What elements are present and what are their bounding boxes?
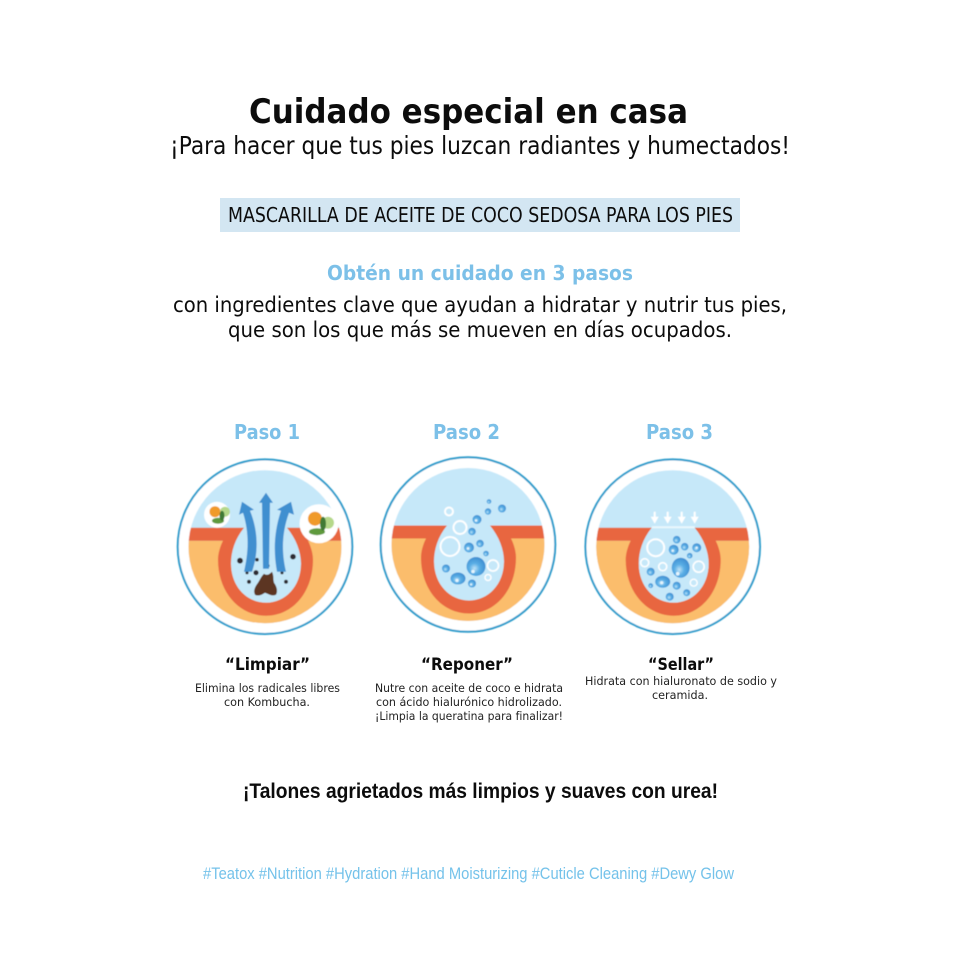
icon: dirt specks <box>237 554 296 584</box>
step 1 caption <box>195 655 340 709</box>
intro text <box>173 293 787 343</box>
step 2 caption: con ácido hialurónico hidrolizado. <box>376 695 562 709</box>
title: Cuidado especial en casa <box>249 92 688 132</box>
icon: white bubbles <box>641 539 704 586</box>
section heading: Obtén un cuidado en 3 pasos <box>327 261 633 285</box>
icon: step 3 seal <box>585 459 760 634</box>
subtitle: ¡Para hacer que tus pies luzcan radiantes y humectados! <box>170 131 790 160</box>
step 2 caption: “Reponer” <box>421 655 513 674</box>
icon: upward arrows <box>239 493 294 572</box>
step 2 heading: Paso 2 <box>433 420 500 444</box>
icon: blue bubbles <box>647 536 701 601</box>
product name banner <box>220 198 740 232</box>
icon: down arrows <box>651 512 699 524</box>
step 1 caption: con Kombucha. <box>224 695 310 709</box>
icon: dirt plug <box>254 572 277 596</box>
step 3 caption: ceramida. <box>652 688 708 702</box>
icon: step 1 cleanse <box>178 459 352 634</box>
step 3 caption: Hidrata con hialuronato de sodio y <box>585 674 777 688</box>
icon: step 2 replenish <box>381 457 555 632</box>
step 1 caption: “Limpiar” <box>225 655 310 674</box>
step 2 caption: ¡Limpia la queratina para finalizar! <box>375 709 563 723</box>
product name banner: MASCARILLA DE ACEITE DE COCO SEDOSA PARA LOS PIES <box>228 203 733 227</box>
icon: blue bubbles <box>442 499 506 588</box>
step 3 heading: Paso 3 <box>646 420 713 444</box>
step 1 caption: Elimina los radicales libres <box>195 681 340 695</box>
icon: right ingredient badge <box>300 504 338 543</box>
intro text: con ingredientes clave que ayudan a hidratar y nutrir tus pies, <box>173 293 787 318</box>
icon: left ingredient badge <box>204 502 230 528</box>
step 2 caption <box>375 655 563 723</box>
step 3 caption <box>585 655 777 702</box>
hashtags: #Teatox #Nutrition #Hydration #Hand Moisturizing #Cuticle Cleaning #Dewy Glow <box>203 864 735 883</box>
step 2 caption: Nutre con aceite de coco e hidrata <box>375 681 563 695</box>
step 1 heading: Paso 1 <box>234 420 300 444</box>
icon: sealing film <box>652 526 695 528</box>
intro text: que son los que más se mueven en días ocupados. <box>228 318 732 343</box>
icon: white bubbles <box>440 508 498 580</box>
step 3 caption: “Sellar” <box>648 655 714 674</box>
closing statement: ¡Talones agrietados más limpios y suaves con urea! <box>243 780 718 803</box>
